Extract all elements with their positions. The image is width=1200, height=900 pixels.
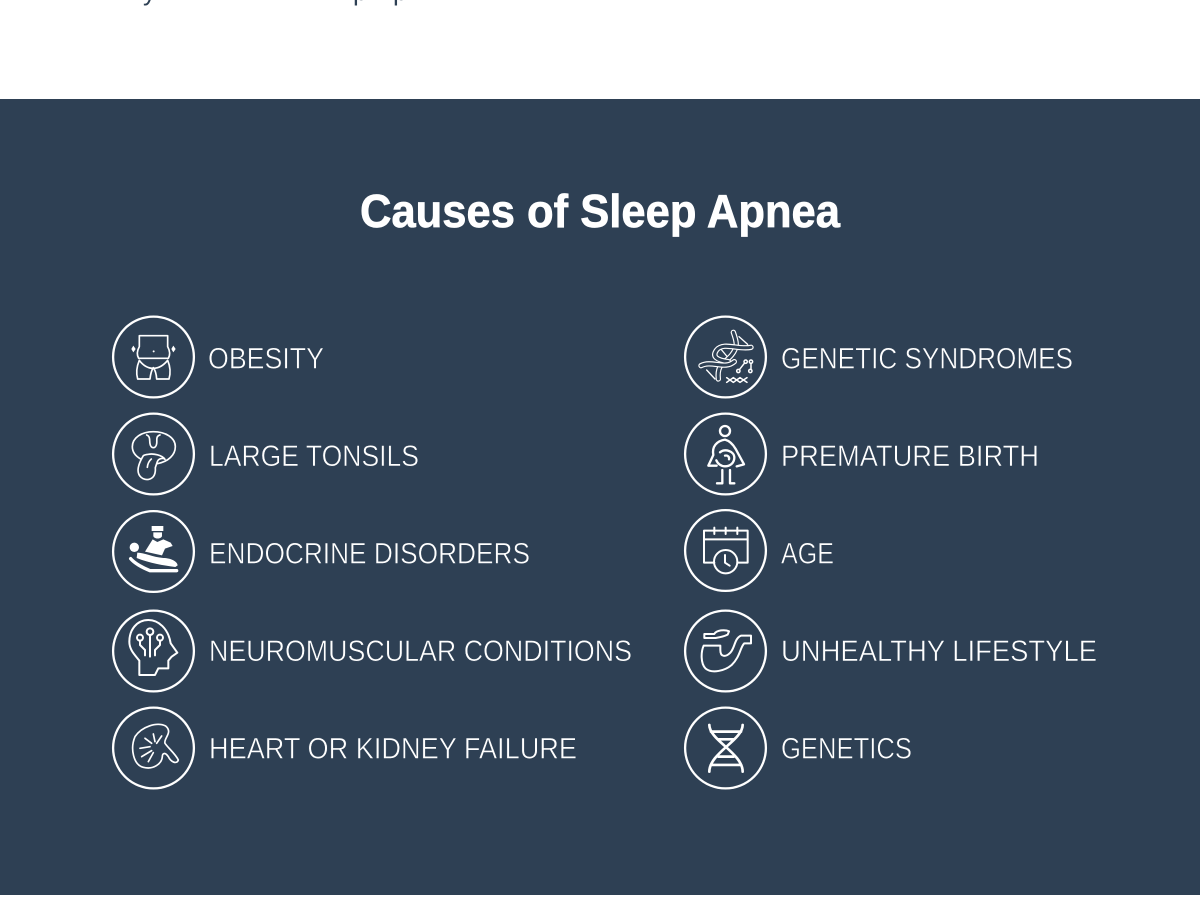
item: neuromuscular conditions <box>113 611 632 691</box>
label: GENETIC SYNDROMES <box>781 342 1073 376</box>
label: AGE <box>781 538 834 570</box>
label: PREMATURE BIRTH <box>781 440 1039 473</box>
item: genetic syndromes <box>685 317 1073 397</box>
label: GENETICS <box>781 732 912 766</box>
clipped text fragments at top edge <box>143 0 407 6</box>
icon: waist <box>113 317 194 397</box>
icon: dna strands with chromosomes <box>685 317 766 397</box>
icon: pregnant figure <box>685 414 766 494</box>
item: heart or kidney failure <box>113 708 577 788</box>
icon: head with circuits <box>113 611 194 691</box>
item: unhealthy lifestyle <box>685 611 1097 691</box>
label: ENDOCRINE DISORDERS <box>209 538 530 570</box>
icon: doctor and patient <box>113 511 194 592</box>
icon: smoking pipe <box>685 611 766 691</box>
label: OBESITY <box>208 342 324 376</box>
item: obesity <box>113 317 324 397</box>
item: premature birth <box>685 414 1039 494</box>
icon: calendar and clock <box>685 510 766 591</box>
label: HEART OR KIDNEY FAILURE <box>209 732 577 766</box>
label: LARGE TONSILS <box>209 440 419 473</box>
item: large tonsils <box>113 414 419 494</box>
icon: kidney <box>113 708 194 788</box>
title: Causes of Sleep Apnea <box>360 185 840 237</box>
label: UNHEALTHY LIFESTYLE <box>781 635 1097 668</box>
icon: dna helix <box>685 708 766 788</box>
item: age <box>685 510 834 591</box>
item: endocrine disorders <box>113 511 530 592</box>
icon: tongue and throat <box>113 414 194 494</box>
label: NEUROMUSCULAR CONDITIONS <box>209 635 632 668</box>
item: genetics <box>685 708 912 788</box>
